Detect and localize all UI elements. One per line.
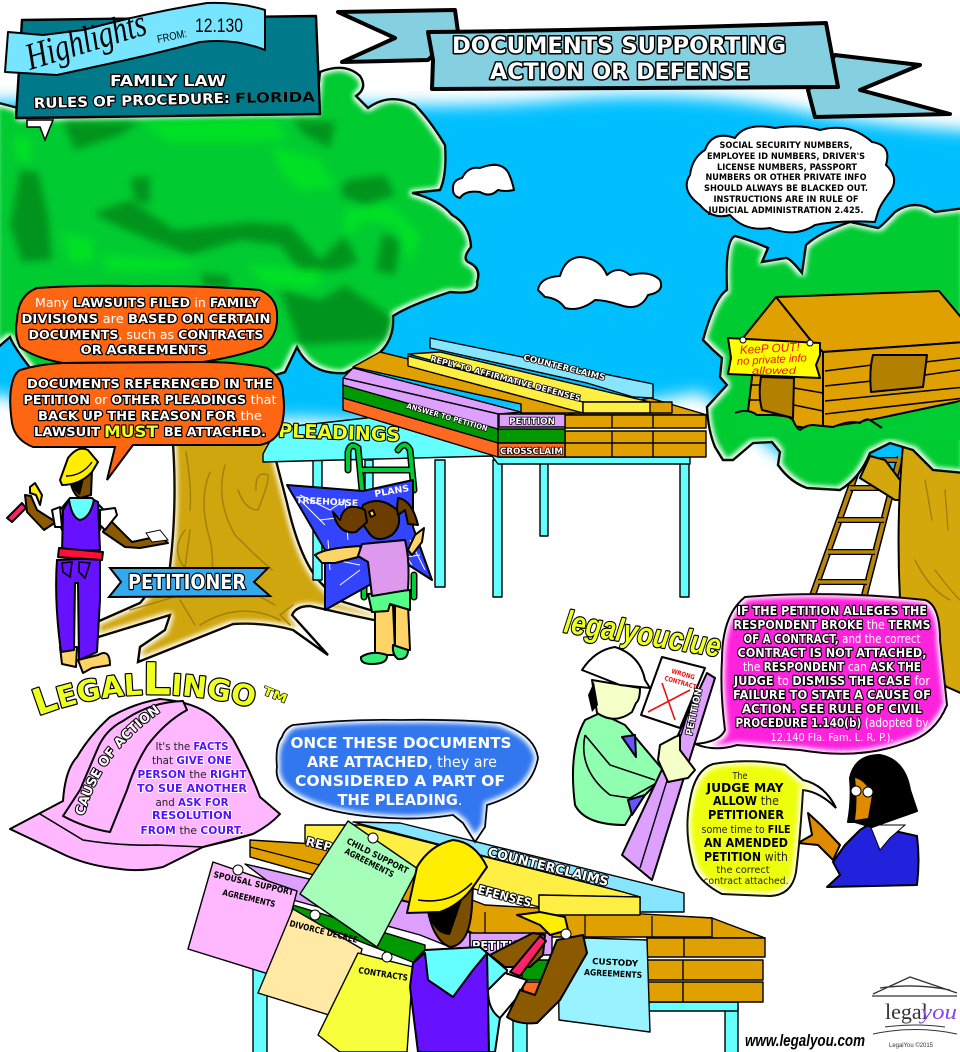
walker handles (348, 445, 414, 597)
sign: keep out: allowed (752, 366, 797, 377)
speech bubble: if the petition: IF THE PETITION ALLEGES THE (737, 604, 927, 618)
document: contracts: CONTRACTS (358, 966, 408, 984)
title ribbon: DOCUMENTS SUPPORTING (452, 34, 786, 59)
highlights ribbon (5, 2, 265, 79)
left trunk (95, 430, 393, 662)
bottom stack labels (304, 834, 610, 953)
thought bubble: private info: INSTRUCTIONS ARE IN RULE OF (714, 195, 859, 205)
bottom table legs (253, 930, 738, 1052)
speech bubble: judge may allow: some time to FILE (702, 823, 790, 836)
thought bubble: private info: SOCIAL SECURITY NUMBERS, (720, 141, 852, 151)
cause of action definition: FROM the COURT. (140, 824, 243, 837)
speech bubble: documents referenced: BACK UP THE REASON FOR the (38, 409, 262, 423)
document: spousal support (188, 862, 297, 976)
stack labels (405, 353, 606, 457)
sign: keep out: KeeP OUT! (739, 340, 801, 357)
petitioner label: PETITIONER (128, 570, 246, 594)
speech bubble: once attached: ONCE THESE DOCUMENTS (290, 734, 512, 752)
legal lingo heading: LEGALLINGO (31, 661, 256, 716)
thought bubble: private info: JUDICIAL ADMINISTRATION 2.425. (708, 206, 864, 216)
hard hat: cause of action: CAUSE OF ACTION (74, 704, 161, 816)
document: divorce decree: DIVORCE DECREE (288, 919, 359, 946)
speech bubble: once attached: CONSIDERED A PART OF (295, 772, 505, 790)
speech bubble: judge may allow: contract attached. (704, 876, 788, 887)
cause of action definition: TO SUE ANOTHER (137, 782, 248, 795)
sign: keep out (728, 337, 820, 378)
stack labels: CROSSCLAIM (500, 447, 563, 457)
highlights panel: FAMILY LAW (110, 72, 227, 90)
speech bubble: judge may allow: PETITION with (704, 850, 788, 864)
document: custody: CUSTODY (592, 957, 639, 969)
document: child support: AGREEMENTS (343, 847, 395, 880)
speech bubble: if the petition: PROCEDURE 1.140(b) (adopted by (736, 716, 928, 730)
speech bubble: documents referenced (10, 362, 284, 480)
lawyer (573, 647, 715, 880)
document: divorce decree (258, 909, 362, 1020)
cause of action definition: that GIVE ONE (152, 754, 232, 767)
pleadings table (263, 417, 690, 597)
lawyer: PETITION (684, 687, 705, 737)
document: spousal support: AGREEMENTS (221, 888, 276, 910)
speech bubble: once attached: THE PLEADING. (338, 791, 462, 809)
treehouse plans (287, 480, 432, 610)
highlights panel (16, 16, 320, 118)
legalyou logo: LegalYou ©2015 (889, 1042, 934, 1049)
bottom pleading stack (245, 822, 765, 1002)
treehouse (735, 291, 960, 440)
speech bubble: if the petition: CONTRACT IS NOT ATTACHED, (738, 646, 926, 660)
document: custody (558, 938, 650, 1032)
speech bubble: documents referenced: DOCUMENTS REFERENCED IN THE (27, 377, 273, 391)
speech bubble: if the petition: ACTION. SEE RULE OF CIVIL (742, 702, 922, 716)
stack labels: PETITION (509, 417, 555, 427)
cloud: small (453, 165, 514, 198)
speech bubble: judge may allow: The (732, 771, 748, 782)
speech bubble: lawsuits (16, 286, 277, 363)
bottom stack labels: EFENSES (476, 882, 533, 910)
petitioner (7, 449, 168, 673)
speech bubble: if the petition: OF A CONTRACT, and the correct (744, 632, 921, 646)
cause of action definition: PERSON the RIGHT (138, 768, 247, 781)
speech bubble: documents referenced: PETITION or OTHER PLEADINGS that (24, 393, 277, 407)
right trunk (860, 445, 960, 695)
speech bubble: if the petition: 12.140 Fla. Fam. L. R. P.). (770, 731, 894, 744)
legalyou clue heading: legalyouclue (562, 603, 724, 664)
stack labels: REPLY TO AFFIRMATIVE DEFENSES (429, 354, 582, 403)
speech bubble: documents referenced: LAWSUIT (34, 425, 101, 439)
legalyou logo: legal (885, 999, 928, 1024)
left tree crown (0, 68, 478, 380)
right tree foliage (703, 205, 960, 490)
thought bubble: private info: EMPLOYEE ID NUMBERS, DRIVER'S (707, 152, 865, 162)
sign: keep out: no private info (737, 352, 807, 368)
title ribbon: ACTION OR DEFENSE (490, 60, 750, 85)
highlights panel: FLORIDA (235, 90, 315, 107)
speech bubble: if the petition: JUDGE to DISMISS THE CASE for (733, 674, 930, 688)
lawyer: CONTRACT (663, 674, 698, 691)
speech bubble: if the petition: the RESPONDENT can ASK THE (743, 660, 921, 674)
speech bubble: judge may allow (687, 761, 836, 896)
lawyer: WRONG (670, 667, 696, 682)
document: child support (300, 821, 418, 947)
legal lingo heading: TM (261, 684, 289, 706)
document: child support: CHILD SUPPORT (345, 837, 410, 877)
treehouse plans: TREEHOUSE (296, 496, 358, 509)
speech bubble: once attached (277, 720, 538, 842)
speech bubble: if the petition (695, 594, 947, 754)
speech bubble: documents referenced: MUST (104, 422, 158, 441)
legalyou logo (872, 977, 957, 1049)
speech bubble: judge may allow: AN AMENDED (704, 836, 788, 850)
bottom stack labels: COUNTERCLAIMS (486, 845, 610, 890)
ladder (812, 457, 900, 597)
thought bubble: private info: LICENSE NUMBERS, PASSPORT (717, 163, 857, 173)
worker with hammer (407, 840, 587, 1052)
cause of action definition: and ASK FOR (156, 796, 229, 809)
cause of action definition: It's the FACTS (156, 740, 229, 753)
thought bubble: private info (687, 126, 894, 232)
highlights ribbon: FROM: (156, 28, 188, 46)
cause of action definition (137, 740, 248, 837)
bottom stack labels: PETITIO (472, 939, 522, 953)
thought bubble: private info: SHOULD ALWAYS BE BLACKED OUT. (704, 184, 868, 194)
speech bubble: lawsuits: Many LAWSUITS FILED in FAMILY (35, 296, 259, 310)
cloud: large (538, 257, 661, 309)
speech bubble: documents referenced: BE ATTACHED. (164, 425, 266, 439)
judge (798, 755, 918, 887)
speech bubble: if the petition: RESPONDENT BROKE the TERMS (734, 618, 930, 632)
speech bubble: lawsuits: DIVISIONS are BASED ON CERTAIN (22, 312, 270, 326)
website url: www.legalyou.com (745, 1031, 865, 1050)
title ribbon (338, 10, 950, 117)
cause of action definition: RESOLUTION (152, 809, 232, 822)
speech bubble: lawsuits: DOCUMENTS , such as CONTRACTS (28, 328, 264, 342)
legalyou logo: you (919, 999, 957, 1024)
stack labels: COUNTERCLAIMS (522, 353, 606, 383)
highlights panel: RULES OF PROCEDURE: (34, 91, 230, 112)
speech bubble: judge may allow: JUDGE MAY (705, 781, 784, 795)
speech bubble: once attached: ARE ATTACHED, they are (307, 753, 497, 771)
petitioner label (109, 568, 270, 597)
stack labels: ANSWER TO PETITION (405, 401, 489, 433)
speech bubble: lawsuits: OR AGREEMENTS . (80, 343, 212, 357)
speech bubble: judge may allow: PETITIONER (708, 808, 784, 822)
bottom stack labels: REPLY (304, 834, 349, 858)
pleading stack (343, 338, 707, 457)
speech bubble: if the petition: FAILURE TO STATE A CAUSE OF (733, 688, 931, 702)
thought bubble: private info: NUMBERS OR OTHER PRIVATE INFO (706, 173, 866, 183)
pleadings label: PLEADINGS (278, 420, 401, 446)
document: spousal support: SPOUSAL SUPPORT (212, 870, 295, 898)
highlights ribbon: 12.130 (195, 16, 243, 37)
document: contracts (318, 952, 413, 1052)
speech bubble: judge may allow: the correct (716, 865, 770, 876)
hard hat: cause of action (9, 698, 281, 872)
speech bubble: judge may allow: ALLOW the (713, 794, 779, 808)
girl (315, 498, 424, 664)
document: custody: AGREEMENTS (584, 968, 642, 981)
treehouse plans: PLANS (374, 484, 410, 500)
